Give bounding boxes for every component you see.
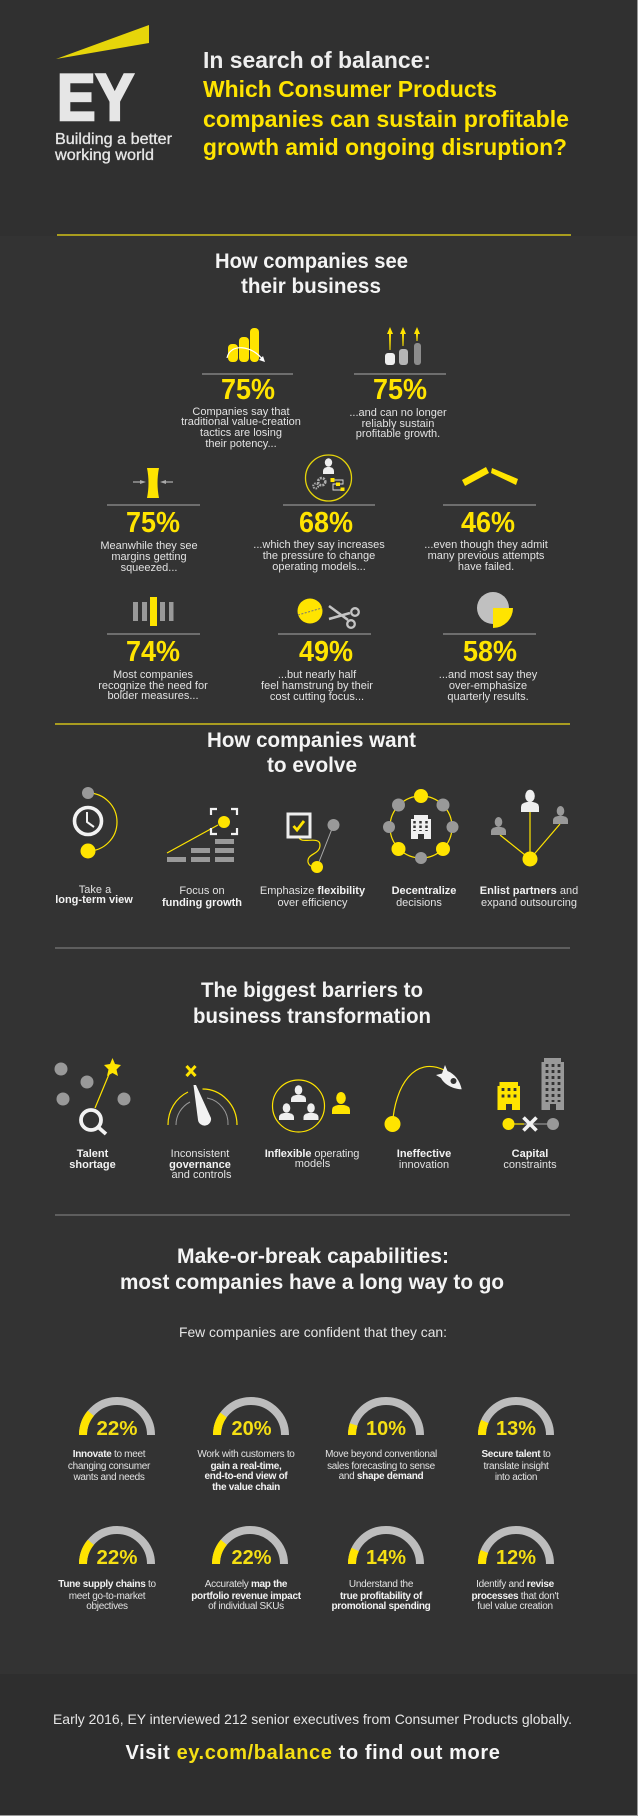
text block: profitable growth. — [356, 428, 440, 440]
stat: 75% cannot sustain growth: 75% — [373, 374, 427, 406]
text block: the value chain — [212, 1482, 280, 1493]
text block: Work with customers to — [197, 1449, 295, 1460]
semicircle gauge — [482, 1530, 550, 1564]
text block — [481, 1449, 551, 1483]
caption: decisions — [396, 897, 442, 909]
caption: shortage — [69, 1159, 116, 1171]
caption: Take a — [79, 884, 112, 896]
semicircle gauge — [482, 1401, 550, 1435]
semicircle gauge — [352, 1401, 420, 1435]
text block — [253, 539, 385, 573]
text block: Most companies — [113, 669, 194, 681]
semicircle gauge — [352, 1530, 420, 1564]
gauge: 22% portfolio revenue — [191, 1530, 302, 1612]
title: growth amid ongoing disruption? — [203, 134, 567, 160]
caption — [265, 1148, 359, 1170]
gauge: 12% revise processes — [471, 1530, 559, 1612]
caption: constraints — [503, 1159, 557, 1171]
gauge: 22% supply chains — [58, 1530, 156, 1612]
icon: broken chevron — [462, 467, 518, 486]
text block — [349, 407, 447, 440]
text block: ...which they say increases — [253, 539, 385, 551]
item: long-term view — [55, 787, 133, 906]
caption: Inconsistent — [171, 1148, 229, 1160]
text block: reliably sustain — [362, 418, 434, 430]
heading: make-or-break capabilities: Make-or-break capabilities: — [177, 1245, 449, 1268]
title: companies can sustain profitable — [203, 106, 569, 132]
gauge: 12% revise processes: 12% — [496, 1547, 536, 1569]
text block: true profitability of — [340, 1591, 423, 1602]
stat: 46% failed attempts: 46% — [461, 507, 515, 539]
text block: wants and needs — [72, 1472, 145, 1483]
text block — [98, 669, 208, 702]
text block: their potency... — [205, 438, 277, 450]
text block: Tune supply chains to — [58, 1579, 156, 1590]
panel: make-or-break capabilities — [58, 1245, 559, 1612]
footer — [53, 1711, 572, 1764]
item: inflexible operating models — [265, 1080, 359, 1170]
text block: processes that don't — [471, 1591, 559, 1602]
heading: how companies see their business — [215, 250, 408, 298]
caption: Emphasize flexibility — [260, 885, 366, 897]
icon: squeezed hourglass — [133, 468, 173, 498]
caption — [162, 885, 242, 909]
stat: 74% bolder measures: 74% — [126, 636, 180, 668]
caption: and controls — [172, 1169, 232, 1181]
gauge: 13% secure talent — [481, 1401, 551, 1483]
icon: people connected to node — [491, 790, 568, 866]
text block: ...but nearly half — [278, 669, 357, 681]
gauge: 14% promotional spending: 14% — [366, 1547, 406, 1569]
heading: how companies want to evolve: How companies want — [207, 729, 416, 752]
semicircle gauge — [83, 1530, 151, 1564]
text block: fuel value creation — [477, 1601, 553, 1612]
panel: how companies want to evolve — [55, 729, 578, 909]
footer: Visit ey.com/balance to find out more — [126, 1742, 500, 1764]
gauge: 13% secure talent: 13% — [496, 1418, 536, 1440]
EY logo: Building a better — [55, 131, 172, 148]
caption: Enlist partners and — [480, 885, 578, 897]
icon: checkbox with winding path — [288, 814, 340, 873]
icon: vertical bars with one yellow — [133, 597, 174, 626]
stat: 75% margins squeezed — [100, 468, 200, 574]
caption: funding growth — [162, 897, 242, 909]
text block: margins getting — [111, 551, 187, 563]
EY logo: working world — [54, 147, 154, 164]
caption: governance — [169, 1159, 231, 1171]
icon: rising bars with arrows — [385, 327, 421, 365]
item: ineffective innovation — [384, 1065, 462, 1171]
icon: buildings with blocked link — [498, 1058, 564, 1130]
text block: objectives — [86, 1601, 128, 1612]
item: flexibility — [260, 814, 366, 909]
caption — [397, 1148, 451, 1171]
text block: changing consumer — [68, 1461, 151, 1472]
gauge: 10% forecasting — [325, 1401, 437, 1482]
item: inconsistent governance — [168, 1066, 237, 1181]
caption: over efficiency — [277, 897, 348, 909]
gauge: 20% real-time view: 20% — [232, 1418, 272, 1440]
panel: how companies see their business — [98, 250, 548, 703]
caption — [260, 885, 366, 909]
icon: gauge with x — [168, 1066, 237, 1126]
text block: traditional value-creation — [181, 416, 301, 428]
text block: Companies say that — [192, 406, 290, 418]
icon: target and rising steps — [167, 809, 237, 862]
gauge: 22% innovate: 22% — [96, 1418, 138, 1440]
stat: 68% pressure on operating models: 68% — [299, 507, 353, 539]
text block — [100, 540, 198, 574]
stat: 75% margins squeezed: 75% — [126, 507, 180, 539]
text block: cost cutting focus... — [270, 691, 364, 703]
text block: Understand the — [349, 1579, 414, 1590]
text block: ...even though they admit — [424, 539, 548, 551]
icon: clock with arc — [74, 787, 117, 858]
semicircle gauge — [216, 1530, 284, 1564]
heading: biggest barriers: business transformation — [193, 1005, 431, 1028]
caption — [503, 1148, 557, 1171]
text block: portfolio revenue impact — [191, 1591, 302, 1602]
text block — [439, 669, 538, 703]
text block — [424, 539, 548, 573]
item: decentralize — [383, 789, 458, 909]
EY logo: EY — [57, 60, 134, 134]
caption — [480, 885, 578, 909]
caption — [169, 1148, 232, 1181]
gauge: 20% real-time view — [197, 1401, 295, 1493]
gauge: 10% forecasting: 10% — [366, 1418, 406, 1440]
stat: 68% pressure on operating models — [253, 455, 385, 573]
icon: bar chart with falling arrow — [227, 328, 265, 362]
semicircle gauge — [217, 1401, 285, 1435]
stat: 75% value-creation tactics — [181, 328, 301, 450]
heading: how companies see their business: How companies see — [215, 250, 408, 273]
text block: Accurately map the — [205, 1579, 288, 1590]
text block: tactics are losing — [200, 427, 282, 439]
text block: Secure talent to — [481, 1449, 551, 1460]
text block: operating models... — [272, 561, 366, 573]
item: capital constraints — [498, 1058, 564, 1171]
caption — [55, 884, 133, 906]
icon: person, gears and flow in circle — [306, 455, 352, 501]
icon: rocket on arc — [384, 1065, 462, 1132]
icon: ring of nodes around building — [383, 789, 458, 864]
gauge: 22% portfolio revenue: 22% — [232, 1547, 272, 1569]
caption: Focus on — [179, 885, 225, 897]
text block — [471, 1579, 559, 1612]
text block: recognize the need for — [98, 680, 208, 692]
text block — [58, 1579, 156, 1612]
text block — [191, 1579, 302, 1612]
text block: meet go-to-market — [69, 1591, 146, 1602]
caption: Capital — [512, 1148, 548, 1160]
text block: translate insight — [484, 1461, 549, 1472]
text block: squeezed... — [121, 562, 177, 574]
title: Which Consumer Products — [203, 76, 497, 102]
icon: team in circle with yellow person — [272, 1080, 350, 1132]
gauge: 14% promotional spending — [332, 1530, 431, 1612]
heading: biggest barriers: The biggest barriers to — [201, 979, 423, 1002]
caption: Talent — [77, 1148, 109, 1160]
title: In search of balance: — [203, 47, 431, 73]
text block — [261, 669, 373, 703]
panel: biggest barriers — [54, 979, 564, 1181]
heading: make-or-break capabilities — [120, 1245, 504, 1294]
stat: 49% cost cutting: 49% — [299, 636, 353, 668]
caption: Decentralize — [392, 885, 456, 897]
text block: promotional spending — [332, 1601, 431, 1612]
text block: ...and most say they — [439, 669, 538, 681]
text block: feel hamstrung by their — [261, 680, 373, 692]
text block — [68, 1449, 151, 1483]
caption: innovation — [399, 1159, 449, 1171]
text block: Innovate to meet — [73, 1449, 146, 1460]
item: talent shortage — [54, 1058, 130, 1171]
caption: models — [295, 1158, 331, 1170]
heading: how companies want to evolve: to evolve — [267, 754, 357, 777]
text block: the pressure to change — [263, 550, 375, 562]
text block — [197, 1449, 295, 1493]
subheading: Few companies are confident that they can: — [179, 1324, 447, 1340]
stat: 75% value-creation tactics: 75% — [221, 374, 275, 406]
text block: into action — [495, 1472, 537, 1483]
EY logo — [54, 25, 172, 164]
footer: Early 2016, EY interviewed 212 senior executives from Consumer Products globally. — [53, 1711, 572, 1727]
stat: 58% quarterly results — [439, 592, 538, 703]
heading: how companies want to evolve — [207, 729, 416, 777]
text block: Move beyond conventional — [325, 1449, 437, 1460]
text block: sales forecasting to sense — [327, 1461, 436, 1472]
gauge: 22% innovate — [68, 1401, 151, 1483]
text block: and shape demand — [339, 1471, 424, 1482]
icon: magnifier and star — [54, 1058, 130, 1134]
stat: 49% cost cutting — [261, 598, 373, 703]
text block: over-emphasize — [449, 680, 527, 692]
text block — [332, 1579, 431, 1612]
text block: quarterly results. — [447, 691, 529, 703]
heading: make-or-break capabilities: most companies have a long way to go — [120, 1271, 504, 1294]
semicircle gauge — [83, 1401, 151, 1435]
text block — [325, 1449, 437, 1482]
caption: expand outsourcing — [481, 897, 577, 909]
caption — [69, 1148, 116, 1171]
text block: gain a real-time, — [210, 1461, 282, 1472]
caption: long-term view — [55, 894, 133, 906]
stat: 46% failed attempts — [424, 467, 548, 573]
icon: yellow circle and scissors — [298, 598, 359, 628]
text block: Identify and revise — [476, 1579, 555, 1590]
text block: Meanwhile they see — [100, 540, 198, 552]
text block: ...and can no longer — [349, 407, 447, 419]
caption: Ineffective — [397, 1148, 451, 1160]
heading: biggest barriers — [193, 979, 431, 1028]
text block: of individual SKUs — [208, 1601, 284, 1612]
stat: 75% cannot sustain growth — [349, 327, 447, 440]
item: funding growth — [162, 809, 242, 909]
stat: 74% bolder measures — [98, 597, 208, 702]
text block: many previous attempts — [428, 550, 545, 562]
icon: pie with yellow wedge — [477, 592, 513, 628]
text block: have failed. — [458, 561, 514, 573]
item: enlist partners — [480, 790, 578, 909]
text block: end-to-end view of — [205, 1471, 288, 1482]
title — [203, 47, 569, 160]
gauge: 22% supply chains: 22% — [96, 1547, 138, 1569]
heading: how companies see their business: their business — [241, 275, 381, 298]
stat: 58% quarterly results: 58% — [463, 636, 517, 668]
text block: bolder measures... — [107, 690, 199, 702]
caption — [392, 885, 456, 909]
caption: Inflexible operating — [265, 1148, 359, 1160]
text block — [181, 406, 301, 450]
